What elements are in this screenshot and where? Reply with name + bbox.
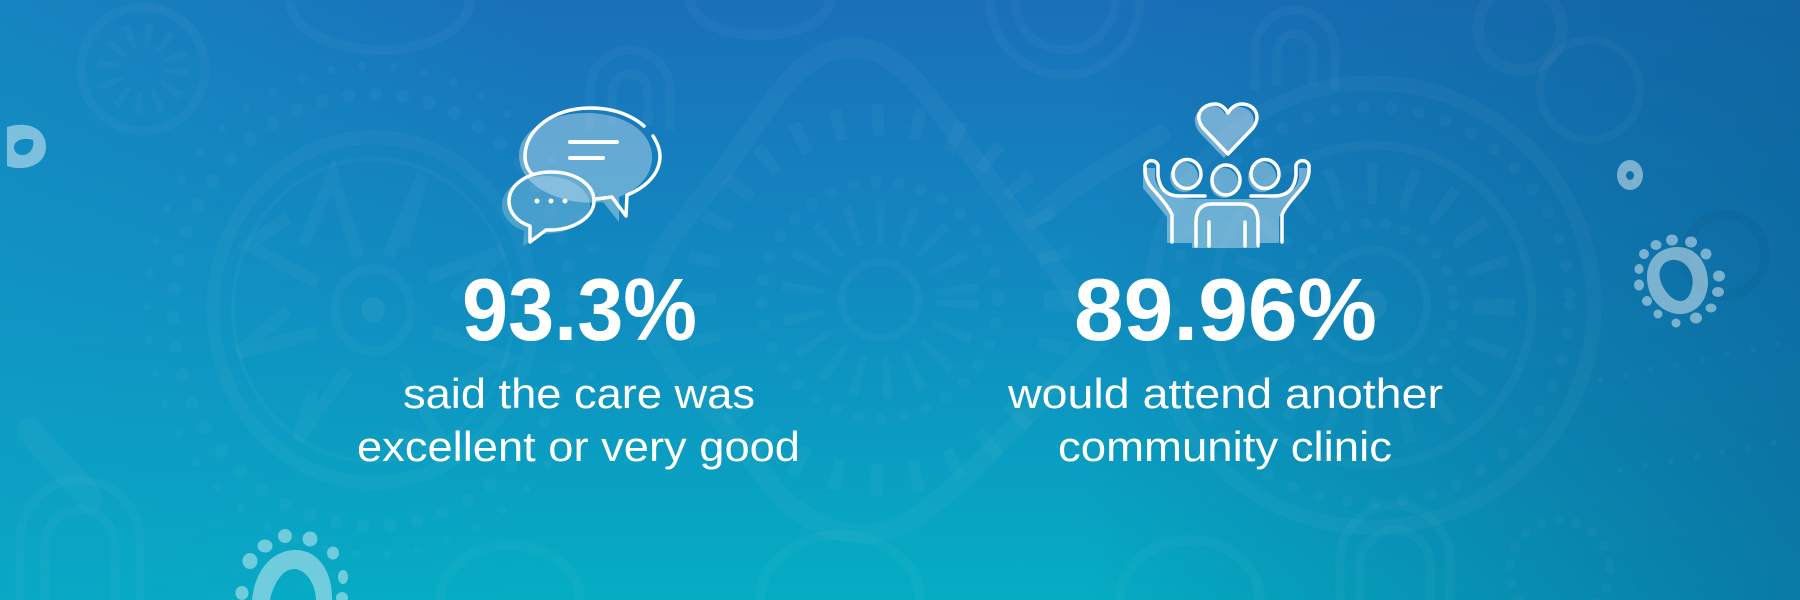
accent: small right ring — [1617, 160, 1643, 190]
icon: people raising a heart — [1143, 104, 1309, 248]
heads fill — [1170, 162, 1276, 198]
big bubble fill — [519, 113, 652, 222]
accent: right dotted ring — [1634, 234, 1725, 328]
heart fill — [1195, 106, 1254, 158]
right mandala — [1150, 83, 1594, 527]
number: 93.3% — [462, 260, 697, 359]
top and edge motifs — [81, 7, 205, 131]
infinity band — [648, 48, 1160, 534]
arms and body outline — [1145, 161, 1309, 246]
bubble text lines — [570, 142, 617, 158]
heads outline — [1173, 160, 1279, 195]
stat: would attend again: community clinic — [1058, 423, 1392, 470]
heart outline — [1199, 104, 1257, 154]
stat: care rating: excellent or very good — [357, 423, 800, 470]
big bubble outline — [525, 108, 660, 216]
bubble dots — [534, 198, 568, 204]
centre mandala — [700, 120, 1060, 480]
caption: would attend another — [1007, 370, 1443, 417]
left mandala — [147, 66, 599, 554]
caption: said the care was — [403, 370, 755, 417]
icon: speech bubbles — [502, 108, 660, 246]
accent: left edge ring — [7, 125, 46, 168]
number: 89.96% — [1074, 260, 1377, 359]
stat: would attend again — [1007, 260, 1443, 470]
small bubble fill — [502, 176, 590, 246]
bodies fill — [1143, 168, 1307, 248]
small bubble outline — [509, 172, 594, 242]
stat: care rating — [357, 260, 800, 470]
accent: bottom dotted ring — [236, 529, 348, 600]
